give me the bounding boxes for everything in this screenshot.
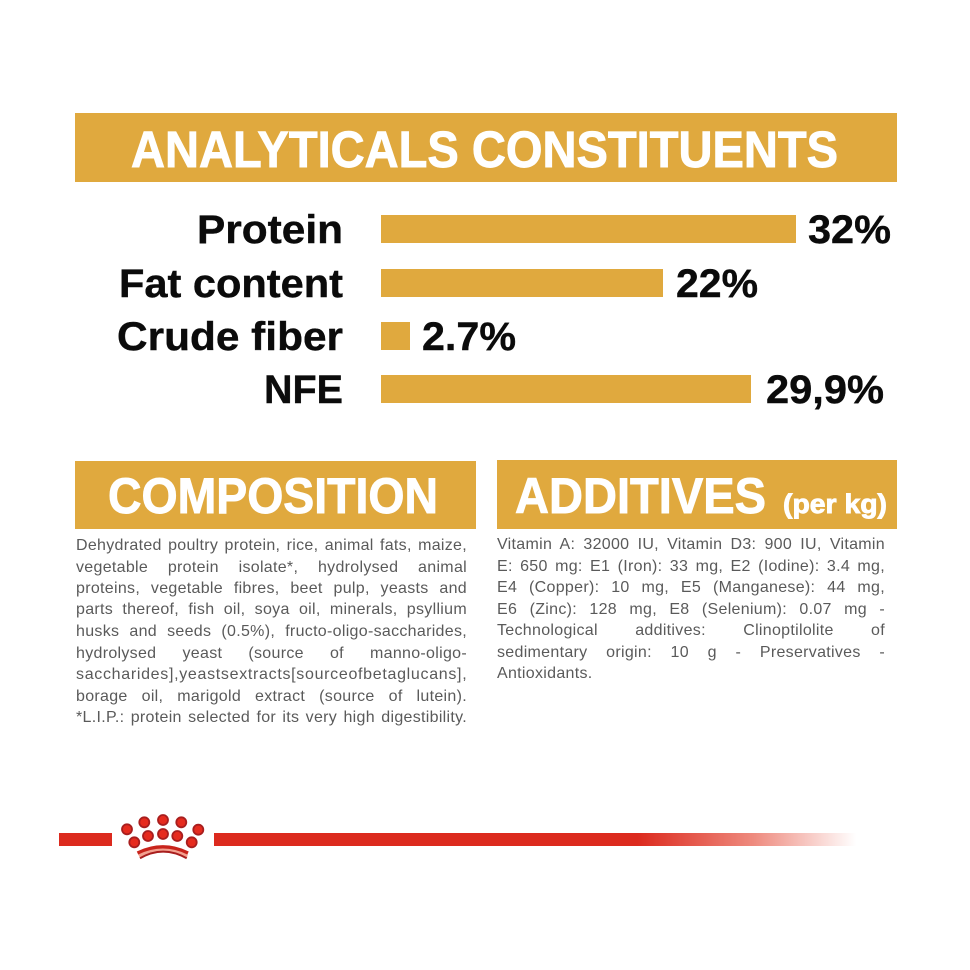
additives text: E: 650 mg: E1 (Iron): 33 mg, E2 (Iodine): 3.4 mg, <box>497 558 885 574</box>
additives text: sedimentary origin: 10 g - Preservatives - <box>497 644 885 660</box>
row: fat content: Fat content <box>119 262 343 306</box>
row: fat content: 22% <box>676 262 758 306</box>
composition text: proteins, vegetable fibres, beet pulp, yeasts and <box>76 580 467 597</box>
composition text: husks and seeds (0.5%), fructo-oligo-saccharides, <box>76 623 467 640</box>
additives heading <box>497 460 897 529</box>
additives heading: ADDITIVES <box>515 468 766 524</box>
composition text: parts thereof, fish oil, soya oil, minerals, psyllium <box>76 601 467 618</box>
composition text: Dehydrated poultry protein, rice, animal fats, maize, <box>76 537 467 554</box>
row: crude fiber: Crude fiber <box>117 315 343 359</box>
additives heading: (per kg) <box>783 489 887 519</box>
composition heading: COMPOSITION <box>108 468 438 524</box>
composition text <box>76 537 467 726</box>
composition text: *L.I.P.: protein selected for its very high digestibility. <box>76 709 467 726</box>
panel: composition <box>75 461 476 726</box>
additives text: Technological additives: Clinoptilolite of <box>497 622 885 639</box>
red line: right segment <box>214 833 856 846</box>
title banner: ANALYTICALS CONSTITUENTS <box>131 121 838 178</box>
row: crude fiber: 2.7% <box>422 315 516 359</box>
composition text: hydrolysed yeast (source of manno-oligo- <box>76 644 467 662</box>
composition text: saccharides],yeastsextracts[sourceofbetaglucans], <box>76 666 467 683</box>
additives text: E4 (Copper): 10 mg, E5 (Manganese): 44 mg, <box>497 579 885 596</box>
icon: royal canin crown <box>122 815 203 858</box>
panel: additives <box>497 460 897 682</box>
row: NFE <box>264 368 884 412</box>
additives text: E6 (Zinc): 128 mg, E8 (Selenium): 0.07 mg - <box>497 600 885 618</box>
panel: analytical constituents <box>75 113 897 412</box>
red line: left segment <box>59 833 112 846</box>
row: NFE: NFE <box>264 368 343 412</box>
additives text: Vitamin A: 32000 IU, Vitamin D3: 900 IU, Vitamin <box>497 536 885 553</box>
row: fat content <box>119 262 758 306</box>
additives text <box>497 536 885 682</box>
composition text: vegetable protein isolate*, hydrolysed animal <box>76 558 467 576</box>
row: NFE: 29,9% <box>766 368 884 412</box>
row: protein <box>197 208 891 252</box>
row: crude fiber <box>117 315 516 359</box>
row: protein: 32% <box>808 208 891 252</box>
row: protein: Protein <box>197 208 343 252</box>
additives text: Antioxidants. <box>497 665 593 682</box>
composition text: borage oil, marigold extract (source of lutein). <box>76 688 467 704</box>
bar chart: analytical constituents <box>75 113 897 412</box>
